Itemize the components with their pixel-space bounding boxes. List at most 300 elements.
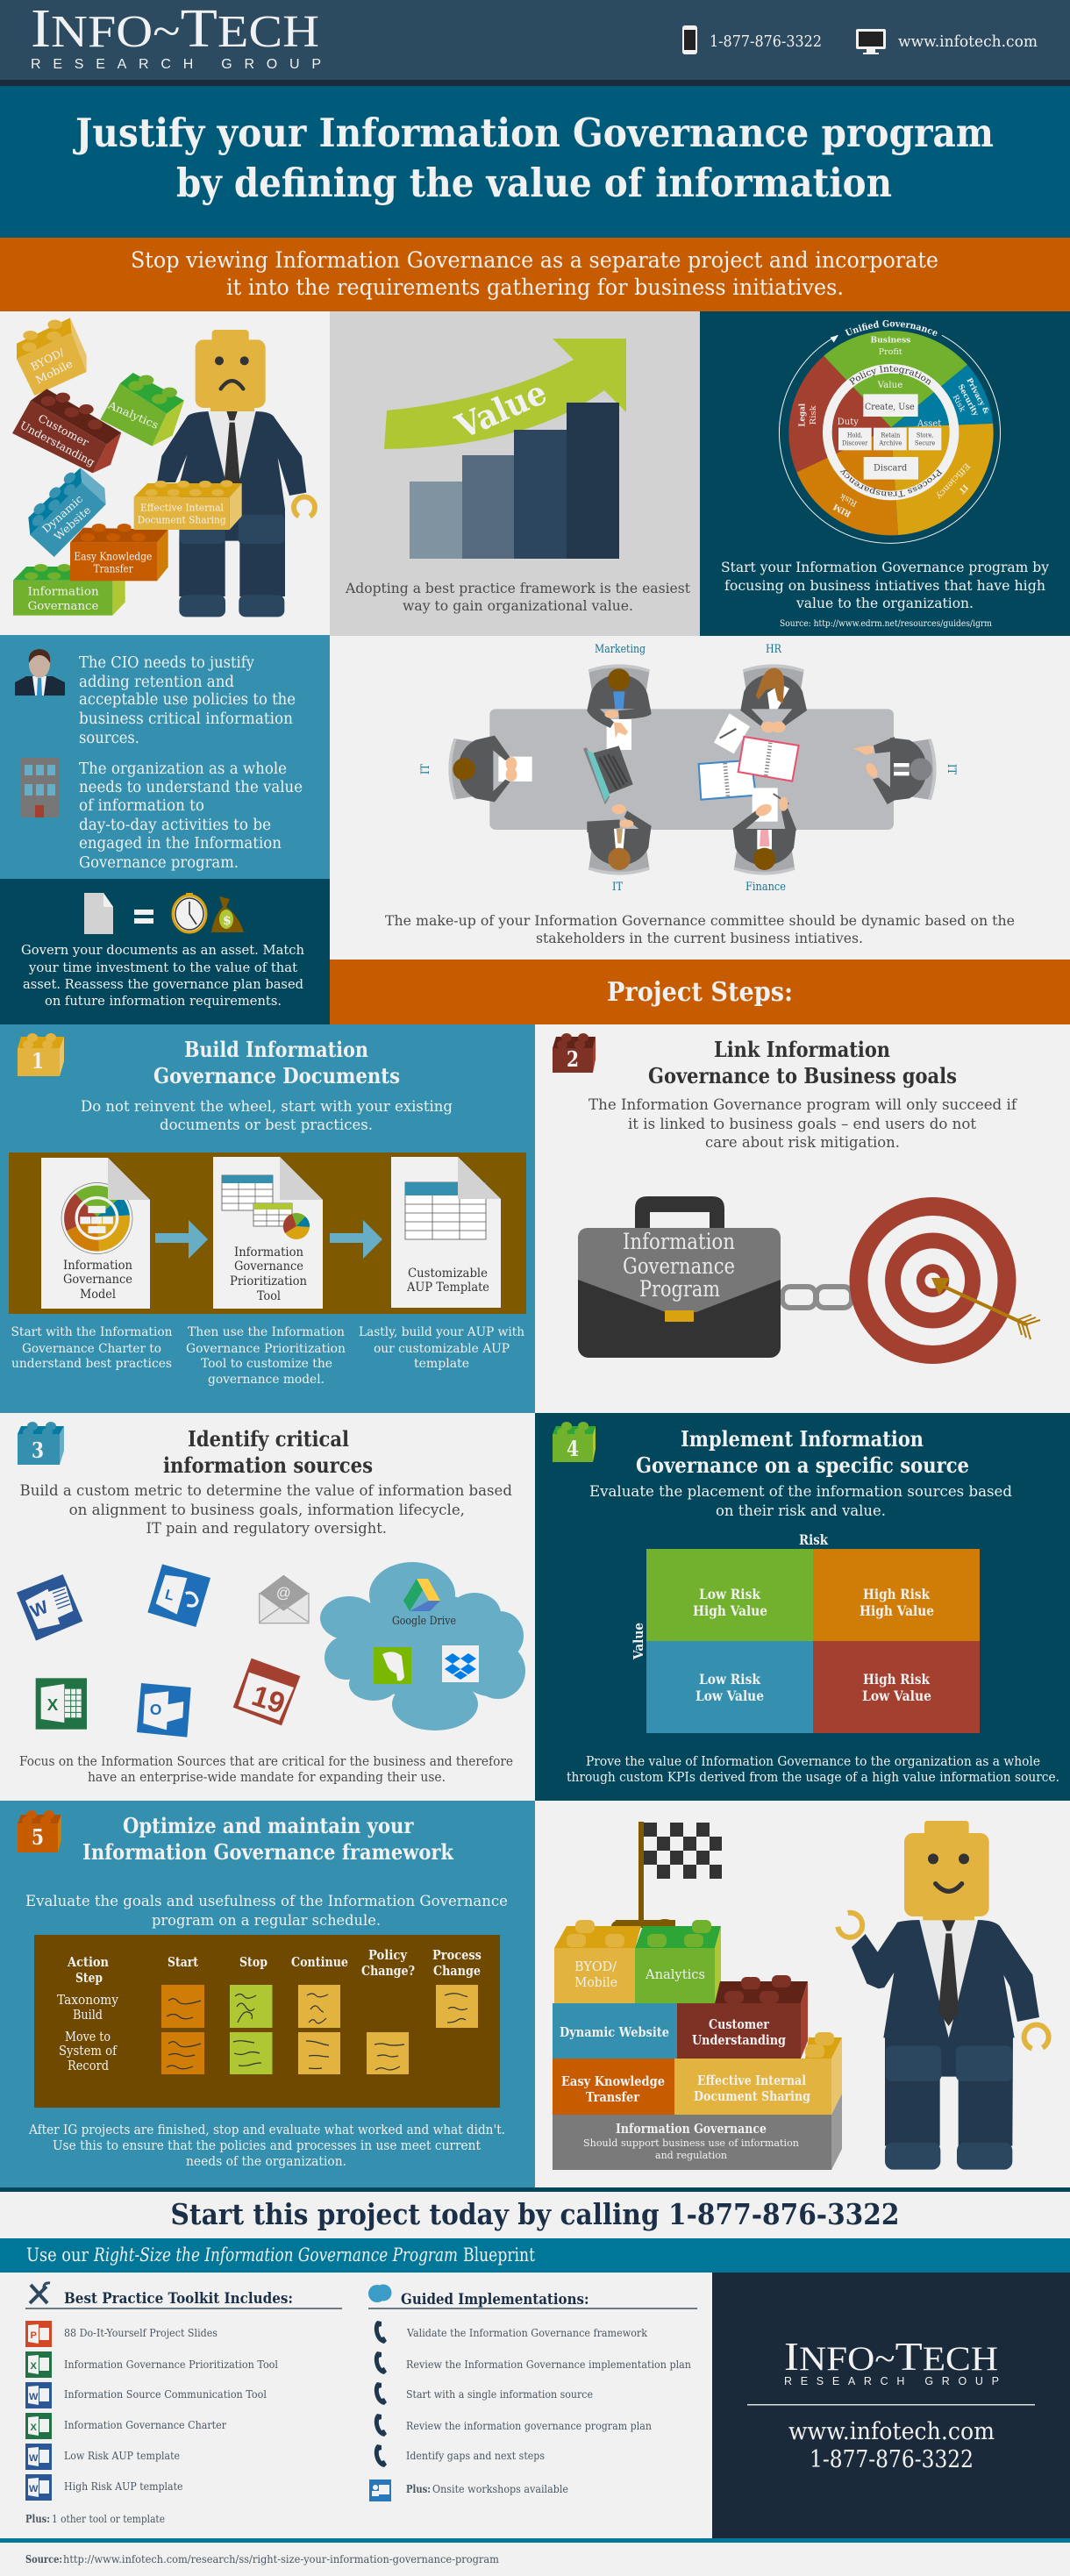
item: communication tool: Information Source Communication Tool <box>64 2388 267 2401</box>
heading: project steps: Project Steps: <box>607 977 793 1008</box>
stakeholder labels <box>419 643 958 894</box>
captions: Then use the Information <box>188 1325 345 1339</box>
captions: template <box>414 1357 469 1371</box>
brick: BYOD/Mobile: Mobile <box>33 357 75 387</box>
chart: risk value matrix: High Risk <box>863 1671 930 1688</box>
chart: governance wheel: Business <box>870 337 910 346</box>
icon: document <box>84 893 113 934</box>
brick stack: BYOD/ <box>574 1959 617 1974</box>
subtitle band: it into the requirements gathering for business initiatives. <box>226 275 844 300</box>
icon: Word <box>25 2382 52 2408</box>
text: match time investment: your time investment to the value of that <box>28 960 297 975</box>
panel: step 2 link to business goals <box>535 1024 1070 1413</box>
table: action steps: Stop <box>239 1955 268 1970</box>
arrow: rising value <box>384 339 626 449</box>
text: CIO needs to justify: acceptable use policies to the <box>79 691 296 709</box>
icon: Outlook: O <box>150 1701 161 1718</box>
icon: brick number 5: 5 <box>32 1824 44 1850</box>
chart: governance wheel: RIM <box>831 502 852 518</box>
document: governance model <box>41 1158 150 1309</box>
blueprint band: Right-Size the Information Governance Program <box>93 2244 458 2266</box>
intro text: Evaluate the placement of the information sources based <box>589 1483 1012 1500</box>
icon: money bag: $ <box>223 914 232 928</box>
icon: phone <box>374 2382 387 2405</box>
intro text <box>589 1483 1012 1519</box>
person: IT bottom <box>587 804 652 874</box>
caption: start with high value initiatives <box>721 559 1049 629</box>
intro text: program on a regular schedule. <box>152 1912 381 1929</box>
text: CIO needs to justify: business critical information <box>79 710 293 728</box>
caption: Prove the value of Information Governance to the organization as a whole <box>586 1755 1040 1769</box>
text: CIO needs to justify: sources. <box>79 730 139 747</box>
icon: workshop <box>369 2480 391 2501</box>
intro text: it is linked to business goals – end users do not <box>628 1116 976 1132</box>
blueprint band: Blueprint <box>463 2244 535 2266</box>
icon: brick number 5 <box>18 1810 61 1852</box>
icon: PowerPoint <box>25 2321 52 2347</box>
subtitle band: Stop viewing Information Governance as a separate project and incorporate <box>131 247 938 273</box>
caption <box>28 2123 505 2169</box>
note: onsite workshops: Onsite workshops available <box>432 2483 568 2495</box>
icon: brick number 4 <box>553 1422 596 1462</box>
item: governance charter: Information Governance Charter <box>64 2419 226 2431</box>
chart: governance wheel: Archive <box>878 440 902 447</box>
brick stack: and regulation <box>655 2149 728 2161</box>
text: match time investment: Govern your documents as an asset. Match <box>21 942 304 958</box>
table: action steps: Policy <box>368 1948 408 1963</box>
captions: our customizable AUP <box>374 1342 510 1356</box>
note: plus one other tool: Plus: <box>25 2513 50 2525</box>
table: action steps: Record <box>68 2059 109 2073</box>
chart: risk value matrix: Low Value <box>696 1688 764 1704</box>
brick stack: Document Sharing <box>694 2089 810 2104</box>
icon: cloud services <box>320 1562 525 1730</box>
intro text: care about risk mitigation. <box>705 1134 900 1151</box>
captions: Lastly, build your AUP with <box>359 1325 524 1339</box>
brick: Customer Understanding: Customer <box>36 412 91 449</box>
item: validate framework: Validate the Information Governance framework <box>406 2327 648 2339</box>
text: CIO needs to justify <box>79 654 296 747</box>
document: governance model: Governance <box>63 1273 132 1287</box>
caption: best practice framework <box>345 580 691 614</box>
chart: governance wheel: Legal <box>798 403 808 427</box>
table: action steps: Move to <box>65 2030 111 2044</box>
caption: start with high value initiatives: focusing on business intiatives that have high <box>724 577 1045 594</box>
brick: Dynamic Website: Website <box>52 503 93 543</box>
icon: briefcase: Governance <box>623 1253 735 1279</box>
table: action steps: Process <box>432 1948 482 1963</box>
captions: governance model. <box>208 1373 325 1387</box>
caption: start with high value initiatives: Start your Information Governance program by <box>721 559 1049 575</box>
text: match time investment: on future information requirements. <box>45 993 282 1009</box>
stakeholder labels: IT <box>612 881 623 894</box>
icon: brick number 3 <box>18 1422 64 1465</box>
brick: Dynamic Website <box>28 467 106 557</box>
icon: cloud services: Google Drive <box>392 1615 456 1628</box>
chart: governance wheel: Process Transparency <box>840 468 942 497</box>
brick: Effective Internal Document Sharing <box>134 480 242 530</box>
brick: Easy Knowledge Transfer: Easy Knowledge <box>74 551 152 563</box>
panel: value bar chart <box>330 311 700 636</box>
icon: chain <box>782 1287 852 1308</box>
call to action heading: Start this project today by calling 1-877-876-3322 <box>170 2197 900 2231</box>
captions: Start with the Information <box>11 1325 172 1339</box>
item: low risk template: Low Risk AUP template <box>64 2450 180 2462</box>
heading: project steps <box>330 960 1070 1024</box>
logo: Info-Tech Research Group: RESEARCH GROUP <box>31 57 321 72</box>
heading: Governance Documents <box>153 1063 400 1088</box>
text: CIO needs to justify: The CIO needs to justify <box>79 654 254 672</box>
person: IT left <box>449 736 517 802</box>
icon: Excel: X <box>30 2423 37 2433</box>
icon: Excel: X <box>47 1695 59 1714</box>
icon: phone <box>374 2414 387 2437</box>
table: action steps: Change? <box>361 1964 415 1979</box>
document: prioritization tool: Governance <box>234 1259 303 1274</box>
chart: governance wheel: Policy Integration <box>849 365 931 386</box>
icon: brick number 2: 2 <box>567 1046 579 1072</box>
icon: calendar: 19 <box>248 1680 289 1721</box>
brick stack: Understanding <box>692 2033 786 2048</box>
icon: briefcase: Program <box>639 1276 720 1302</box>
meeting illustration <box>449 664 936 874</box>
table: action steps: Start <box>168 1955 198 1970</box>
caption: needs of the organization. <box>186 2155 346 2169</box>
intro text: IT pain and regulatory oversight. <box>146 1520 387 1537</box>
heading: Identify critical <box>188 1426 349 1452</box>
brick stack: Analytics <box>645 1966 705 1982</box>
heading: Build Information <box>184 1037 368 1062</box>
brick: Information Governance: Information <box>28 585 99 598</box>
person: HR <box>740 664 807 732</box>
text: organization needs to understand: of information to <box>79 797 204 815</box>
person: marketing <box>587 664 652 739</box>
chart: risk value matrix: Risk <box>799 1531 829 1548</box>
brick stack: Information Governance <box>616 2122 767 2137</box>
chart: risk value matrix: Low Risk <box>699 1586 760 1602</box>
intro text: documents or best practices. <box>160 1117 373 1133</box>
chart: governance wheel: Risk <box>950 394 967 414</box>
brick: Analytics: Analytics <box>105 398 160 432</box>
stakeholder labels: IT <box>419 764 432 774</box>
panel: frustrated lego man with scattered bricks <box>0 311 330 635</box>
icon: mobile phone <box>682 25 697 54</box>
icon: Word: W <box>29 2392 39 2402</box>
chart: governance wheel: Security <box>956 383 981 418</box>
brick: Analytics <box>100 373 184 446</box>
chart: governance wheel: Asset <box>917 418 942 429</box>
brick stack: Easy Knowledge <box>561 2074 665 2089</box>
heading <box>153 1037 400 1088</box>
chart: governance wheel <box>779 320 1002 544</box>
brick: Easy Knowledge Transfer <box>70 524 168 581</box>
chart: risk value matrix: High Risk <box>863 1586 930 1602</box>
chart: risk value matrix: Low Value <box>862 1688 931 1704</box>
sticky notes <box>161 1985 478 2074</box>
caption: best practice framework: way to gain organizational value. <box>403 597 633 614</box>
heading: Information Governance framework <box>82 1839 454 1865</box>
person: finance <box>732 797 796 874</box>
caption: start with high value initiatives: value to the organization. <box>795 595 974 611</box>
icon: brick number 1 <box>18 1033 64 1076</box>
panel: best practice toolkit <box>25 2283 342 2525</box>
item: prioritization tool: Information Governance Prioritization Tool <box>64 2358 278 2371</box>
icon: email envelope <box>260 1575 309 1623</box>
heading <box>163 1426 373 1478</box>
icon: equals sign <box>134 910 153 924</box>
text: organization needs to understand: day-to-day activities to be <box>79 817 271 834</box>
document: prioritization tool: Prioritization <box>230 1274 307 1288</box>
text: organization needs to understand: The organization as a whole <box>79 760 287 778</box>
brick stack: Should support business use of information <box>583 2137 800 2149</box>
note: onsite workshops: Plus: <box>406 2483 431 2495</box>
table: action steps: Build <box>73 2009 103 2023</box>
icon: Lync: L <box>163 1588 175 1604</box>
icon: PowerPoint: P <box>30 2330 37 2341</box>
chart: risk value matrix: High Value <box>860 1602 934 1619</box>
brick: Dynamic Website: Dynamic <box>39 492 86 535</box>
caption: best practice framework: Adopting a best practice framework is the easiest <box>345 580 691 596</box>
icon: email envelope: @ <box>276 1585 291 1602</box>
captions: Tool to customize the <box>201 1357 332 1371</box>
happy lego man <box>838 1821 1049 2170</box>
application icons <box>17 1564 309 1738</box>
subtitle band <box>0 238 1070 311</box>
icon: calendar <box>233 1659 300 1725</box>
brick: Customer Understanding: Understanding <box>18 419 97 468</box>
brick: Information Governance <box>13 564 125 616</box>
brick stack: Mobile <box>574 1974 617 1990</box>
icon: briefcase: Information <box>623 1229 735 1254</box>
brick: Information Governance: Governance <box>28 600 98 613</box>
icon: CIO <box>15 649 65 696</box>
blueprint band <box>0 2238 1070 2273</box>
arrow <box>330 1220 382 1259</box>
caption: committee make-up <box>385 913 1015 946</box>
icon: phone <box>374 2351 387 2374</box>
chart: governance wheel: Privacy & <box>964 377 990 416</box>
document: AUP template <box>391 1157 501 1308</box>
icon: Word <box>25 2444 52 2470</box>
table: action steps: Step <box>75 1971 103 1986</box>
chart: governance wheel: Store, <box>917 432 933 439</box>
heading <box>636 1426 969 1478</box>
heading: toolkit: Best Practice Toolkit Includes: <box>64 2290 293 2308</box>
arrow <box>155 1220 208 1259</box>
chart: governance wheel: Unified Governance <box>845 320 937 336</box>
icon: Excel <box>36 1678 87 1730</box>
chart: governance wheel: Hold, <box>847 432 862 439</box>
caption: Focus on the Information Sources that are critical for the business and therefore <box>19 1755 513 1769</box>
panel: step 4 risk value matrix <box>535 1413 1070 1801</box>
arrow: rising value: Value <box>449 372 553 447</box>
caption: After IG projects are finished, stop and evaluate what worked and what didn't. <box>28 2123 505 2137</box>
heading: Implement Information <box>681 1426 924 1452</box>
title band: by defining the value of information <box>176 160 892 206</box>
icon: phone <box>374 2444 387 2467</box>
text: CIO needs to justify: adding retention and <box>79 674 234 691</box>
heading: Governance to Business goals <box>648 1063 957 1088</box>
phone number: 1-877-876-3322 <box>710 32 822 51</box>
document: AUP template: Customizable <box>408 1267 488 1281</box>
text: organization needs to understand <box>79 760 303 872</box>
phone number: 1-877-876-3322 <box>810 2446 974 2473</box>
chart: governance wheel: Risk <box>838 491 859 509</box>
item: project slides: 88 Do-It-Yourself Project Slides <box>64 2327 218 2339</box>
meeting table <box>489 709 894 830</box>
text: organization needs to understand: Governance program. <box>79 854 239 872</box>
caption: committee make-up: stakeholders in the current business intiatives. <box>536 931 863 946</box>
icon: phone <box>374 2321 387 2344</box>
document: prioritization tool: Information <box>234 1245 303 1259</box>
brick: Effective Internal Document Sharing: Effective Internal <box>140 502 224 514</box>
text: match time investment: asset. Reassess the governance plan based <box>23 976 303 992</box>
divider band <box>0 2187 1070 2192</box>
captions: Governance Charter to <box>22 1342 161 1356</box>
header bar <box>0 0 1070 86</box>
item: review program plan: Review the information governance program plan <box>406 2420 652 2432</box>
heading: Governance on a specific source <box>636 1452 969 1478</box>
brick stack: Dynamic Website <box>560 2025 669 2040</box>
chart: governance wheel: Value <box>877 380 902 390</box>
source line: http://www.infotech.com/research/ss/right-size-your-information-governance-program <box>63 2553 500 2565</box>
document: prioritization tool: Tool <box>257 1289 281 1303</box>
brick stack: Transfer <box>586 2090 639 2105</box>
website: www.infotech.com <box>788 2418 995 2445</box>
note: plus one other tool: 1 other tool or template <box>52 2513 165 2525</box>
caption: Use this to ensure that the policies and processes in use meet current <box>53 2139 481 2153</box>
intro text <box>25 1893 508 1929</box>
website address: www.infotech.com <box>898 32 1038 51</box>
icon: Excel <box>25 2351 52 2378</box>
captions: understand best practices <box>11 1357 172 1371</box>
chart: governance wheel: Risk <box>809 405 818 425</box>
brick stack <box>553 1920 842 2170</box>
brick stack: Effective Internal <box>697 2073 806 2088</box>
icon: blue speech blob <box>368 2284 391 2302</box>
icon: Word <box>25 2474 52 2501</box>
brick: Easy Knowledge Transfer: Transfer <box>94 563 133 575</box>
caption <box>19 1755 513 1785</box>
table: action steps: Taxonomy <box>57 1994 119 2008</box>
intro text: The Information Governance program will only succeed if <box>588 1096 1018 1113</box>
caption: start with high value initiatives: Source: http://www.edrm.net/resources/guides/igrm <box>780 618 992 629</box>
text: match time investment <box>21 942 304 1009</box>
chart: governance wheel: Discover <box>842 440 868 447</box>
bottom strip <box>0 2538 1070 2543</box>
item: single source: Start with a single information source <box>406 2388 593 2401</box>
brick: Customer Understanding <box>12 389 121 473</box>
panel: contact <box>712 2273 1070 2538</box>
icon: Word <box>17 1574 82 1641</box>
title band <box>0 86 1070 238</box>
icon: Excel: X <box>30 2361 37 2372</box>
chart: governance wheel: Discard <box>874 463 908 474</box>
panel: completed brick stack and happy lego man <box>535 1801 1070 2187</box>
document: governance model: Information <box>63 1259 132 1273</box>
person: IT right <box>853 737 936 804</box>
blueprint band: Use our <box>26 2244 89 2266</box>
table: action steps: Change <box>433 1964 481 1979</box>
stakeholder labels: IT <box>945 764 958 774</box>
chart: governance wheel: Profit <box>879 347 902 357</box>
brick: Effective Internal Document Sharing: Document Sharing <box>138 514 226 526</box>
bar chart <box>410 403 619 559</box>
intro text <box>588 1096 1018 1151</box>
intro text <box>81 1098 453 1133</box>
item: gaps and next steps: Identify gaps and next steps <box>406 2450 545 2462</box>
heading: guided implementations: Guided Implementations: <box>401 2291 589 2308</box>
panel: committee meeting <box>330 636 1070 960</box>
logo: Info-Tech Research Group: INFO~TECH <box>31 0 319 59</box>
caption <box>567 1755 1059 1785</box>
stakeholder labels: HR <box>766 643 782 656</box>
icon: Lync <box>147 1564 210 1627</box>
table items: papers, laptop, notebooks <box>498 713 799 822</box>
icon: brick number 4: 4 <box>567 1436 579 1461</box>
lego man <box>157 330 315 617</box>
captions <box>11 1325 524 1387</box>
icon: brick number 2 <box>553 1033 596 1073</box>
icon: briefcase <box>578 1196 781 1358</box>
chart: governance wheel: IT <box>957 482 970 496</box>
text: organization needs to understand: needs to understand the value <box>79 779 303 796</box>
panel: CIO and organization <box>0 635 330 879</box>
heading: Link Information <box>714 1037 890 1062</box>
caption: committee make-up: The make-up of your Information Governance committee should be dynamic based on the <box>385 913 1015 929</box>
brick: BYOD/Mobile <box>17 318 87 396</box>
icon: Word: W <box>29 2484 39 2494</box>
document: governance model: Model <box>80 1288 116 1302</box>
source line: Source: <box>25 2553 62 2565</box>
chart: governance wheel: Efficiency <box>934 460 972 502</box>
chart: governance wheel: Duty <box>838 417 859 427</box>
chart: governance wheel: Secure <box>915 440 935 447</box>
table: action steps: Action <box>67 1955 109 1970</box>
chart: risk value matrix <box>631 1531 980 1733</box>
chart: governance wheel: Retain <box>881 432 901 439</box>
intro text: Evaluate the goals and usefulness of the Information Governance <box>25 1893 508 1909</box>
table: action steps: Continue <box>291 1955 348 1970</box>
logo: Info-Tech Research Group: RESEARCH GROUP <box>784 2375 999 2387</box>
panel: step 5 optimize and maintain <box>0 1801 535 2187</box>
text: organization needs to understand: engaged in the Information <box>79 835 282 853</box>
icon: Excel <box>25 2413 52 2439</box>
panel: information governance reference model <box>700 311 1070 636</box>
panel: step 1 build documents <box>0 1024 535 1413</box>
icon: office building <box>20 758 60 817</box>
icon: stopwatch <box>173 893 206 932</box>
chart: risk value matrix: Value <box>631 1623 646 1660</box>
title band: Justify your Information Governance program <box>72 110 994 156</box>
document flow <box>9 1152 526 1314</box>
icon: Word: W <box>28 1596 52 1622</box>
stakeholder labels: Marketing <box>595 643 646 656</box>
icon: monitor <box>856 29 886 54</box>
icon: target with arrow <box>849 1197 1040 1364</box>
item: review implementation plan: Review the Information Governance implementation plan <box>406 2358 691 2371</box>
document: AUP template: AUP Template <box>406 1281 489 1295</box>
icon: checkered flag <box>611 1822 722 1932</box>
captions: Governance Prioritization <box>186 1342 346 1356</box>
chart: risk value matrix: High Value <box>693 1602 767 1619</box>
icon: Outlook <box>137 1683 191 1738</box>
item: high risk template: High Risk AUP template <box>64 2480 182 2493</box>
icon: tools <box>30 2283 50 2303</box>
intro text: Do not reinvent the wheel, start with your existing <box>81 1098 453 1115</box>
intro text: Build a custom metric to determine the value of information based <box>19 1482 512 1499</box>
heading <box>648 1037 957 1088</box>
